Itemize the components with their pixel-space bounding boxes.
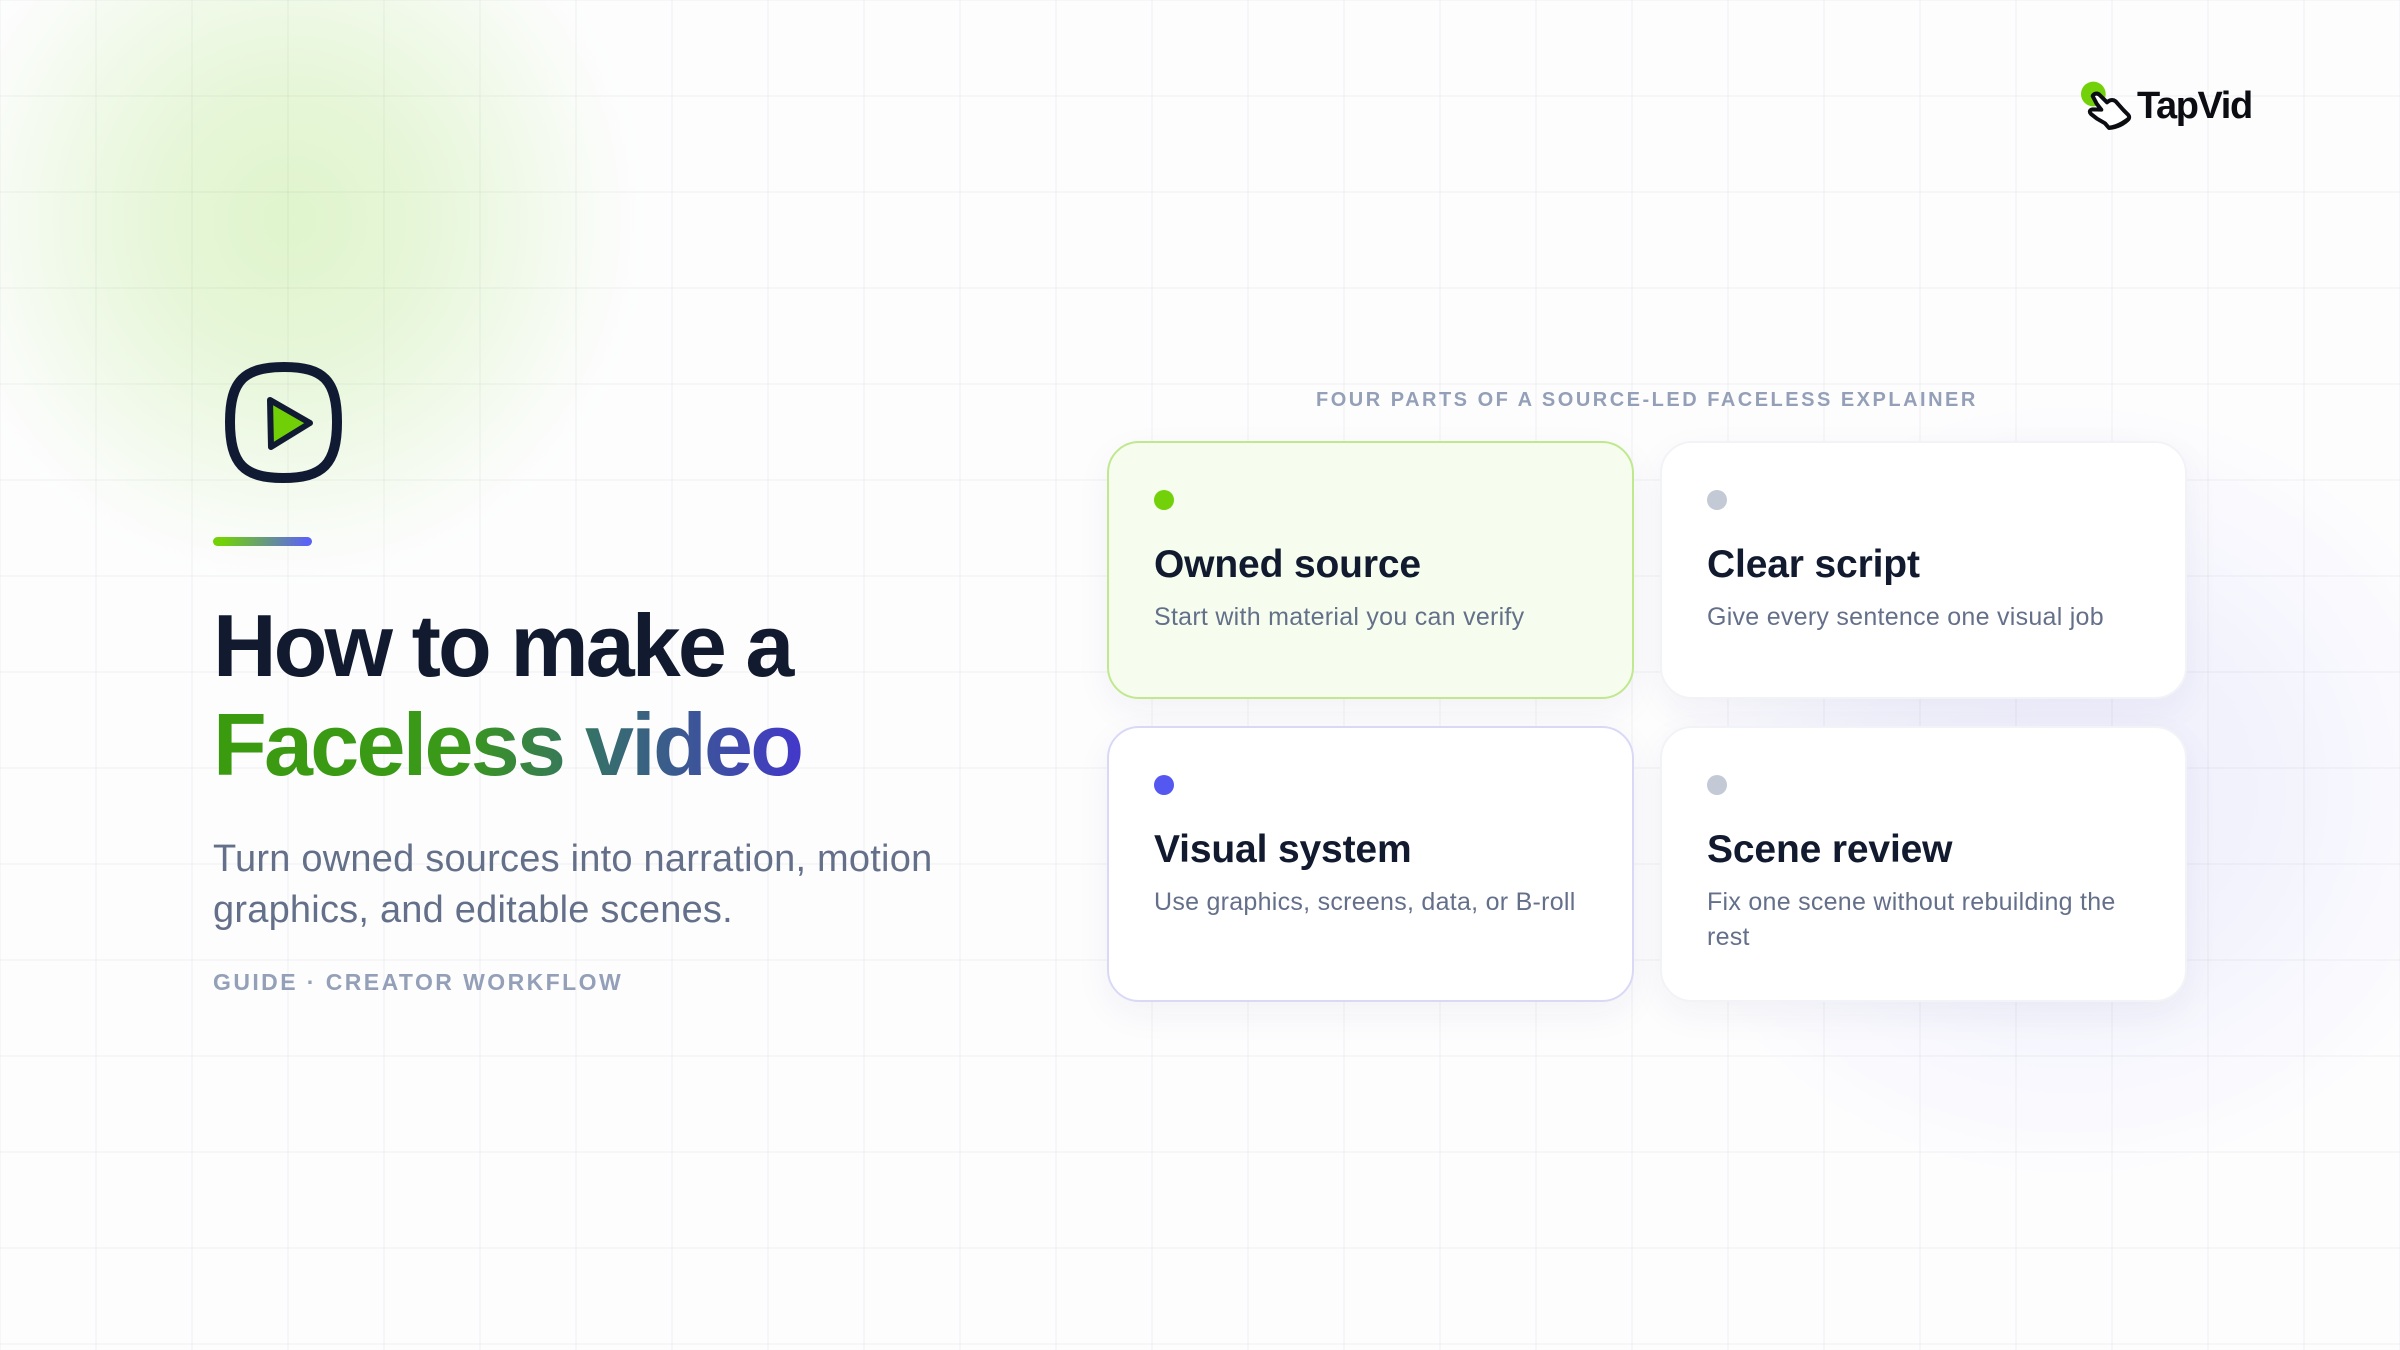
panel: clear script <box>1660 441 2187 699</box>
dot: grey <box>1707 490 1727 510</box>
subtitle: graphics, and editable scenes. <box>213 889 733 931</box>
icon: tapping hand <box>2081 82 2132 130</box>
card title: Clear script <box>1707 543 1920 586</box>
logo wordmark: TapVid <box>2137 85 2252 127</box>
dot: indigo <box>1154 775 1174 795</box>
logo: TapVid <box>2081 82 2252 130</box>
subtitle: Turn owned sources into narration, motion <box>213 838 932 880</box>
card title: Scene review <box>1707 828 1952 871</box>
subtitle <box>213 838 932 931</box>
card description: Fix one scene without rebuilding the <box>1707 888 2116 916</box>
section heading: FOUR PARTS OF A SOURCE-LED FACELESS EXPLAINER <box>1316 389 1978 411</box>
background green glow <box>0 0 650 590</box>
card description: Start with material you can verify <box>1154 603 1524 631</box>
accent bar <box>213 537 312 546</box>
title line two gradient: Faceless video <box>213 695 801 794</box>
panel: owned source <box>1107 441 1634 699</box>
card description: Use graphics, screens, data, or B-roll <box>1154 888 1576 916</box>
panel: scene review <box>1660 726 2187 1002</box>
icon: play button <box>225 362 342 483</box>
card description: rest <box>1707 923 1750 951</box>
dot: grey <box>1707 775 1727 795</box>
eyebrow label: GUIDE · CREATOR WORKFLOW <box>213 969 623 995</box>
panel: visual system <box>1107 726 1634 1002</box>
title <box>213 596 801 794</box>
card title: Visual system <box>1154 828 1412 871</box>
title line one: How to make a <box>213 596 791 695</box>
dot: green <box>1154 490 1174 510</box>
card description: Give every sentence one visual job <box>1707 603 2104 631</box>
card title: Owned source <box>1154 543 1421 586</box>
card description <box>1707 888 2116 951</box>
background indigo glow <box>1650 400 2400 1180</box>
